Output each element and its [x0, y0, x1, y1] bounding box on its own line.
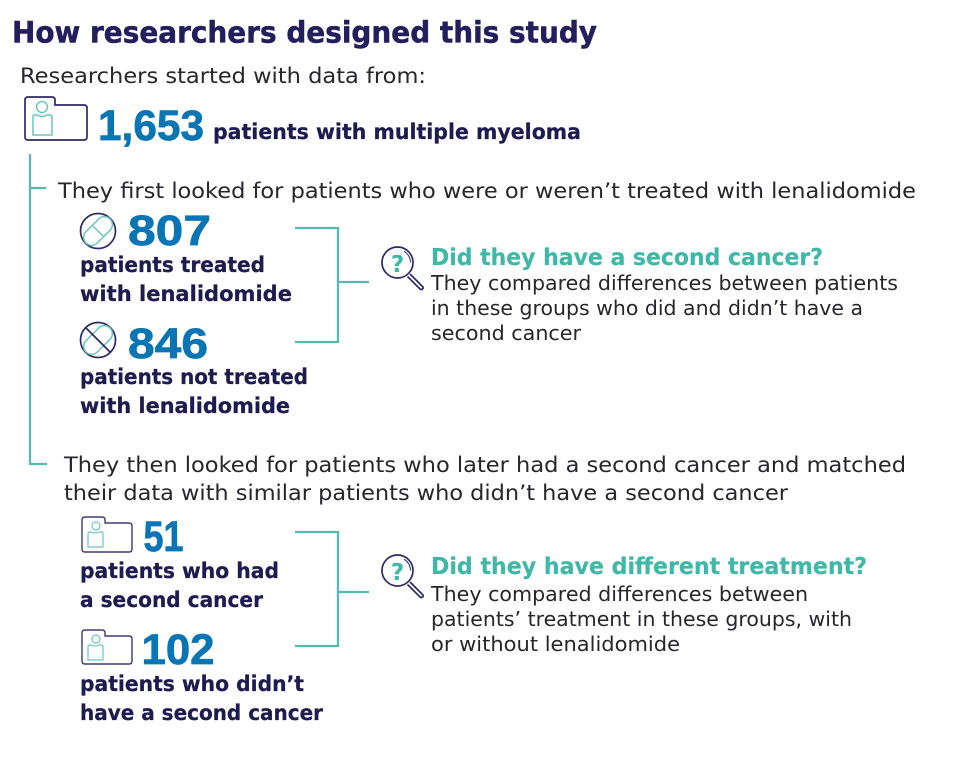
callout: second cancer question: They compared differences between patients — [430, 271, 898, 295]
no second cancer label: patients who didn’t — [80, 672, 304, 696]
callout: treatment question: Did they have different treatment? — [431, 554, 867, 580]
icon: patient folder, second cancer — [82, 517, 132, 552]
step 2 description: They then looked for patients who later had a second cancer and matched — [63, 453, 906, 477]
flow connector: main branch — [30, 154, 47, 464]
total patients statistic — [98, 102, 581, 150]
second cancer label: a second cancer — [80, 588, 264, 612]
total patients statistic: 1,653 — [98, 102, 204, 150]
treated group label: with lenalidomide — [80, 282, 292, 306]
icon: patient folder, no second cancer — [82, 630, 132, 664]
callout: treatment question: patients’ treatment in these groups, with — [431, 607, 852, 631]
second cancer label — [80, 559, 279, 612]
no second cancer label: have a second cancer — [80, 701, 324, 725]
callout: second cancer question: in these groups who did and didn’t have a — [431, 296, 863, 320]
total patients statistic: patients with multiple myeloma — [213, 120, 581, 144]
no second cancer label — [80, 672, 324, 725]
icon: crossed-out pill — [80, 322, 116, 358]
second cancer statistic: 51 — [144, 513, 184, 561]
icon: magnifying glass with question mark, second: ? — [391, 560, 404, 586]
icon: magnifying glass with question mark, second — [382, 555, 423, 598]
untreated group label — [80, 365, 308, 418]
untreated group label: patients not treated — [80, 365, 308, 389]
treated group label: patients treated — [80, 253, 265, 277]
icon: magnifying glass with question mark: ? — [391, 252, 404, 278]
callout: treatment question — [430, 554, 867, 656]
bracket connector: second cancer groups — [295, 532, 369, 646]
no second cancer statistic: 102 — [142, 626, 214, 674]
callout: second cancer question — [430, 245, 898, 345]
untreated group label: with lenalidomide — [80, 394, 290, 418]
step 2 description: their data with similar patients who didn’t have a second cancer — [64, 481, 788, 505]
untreated group statistic: 846 — [128, 320, 208, 368]
intro text: Researchers started with data from: — [20, 64, 426, 88]
treated group label — [80, 253, 292, 306]
callout: second cancer question: second cancer — [431, 321, 582, 345]
icon: magnifying glass with question mark — [382, 247, 423, 290]
icon: patient folder — [25, 97, 87, 140]
callout: second cancer question: Did they have a second cancer? — [431, 245, 823, 271]
step 2 description — [63, 453, 906, 505]
title: How researchers designed this study — [12, 16, 597, 50]
second cancer label: patients who had — [80, 559, 279, 583]
step 1 description: They first looked for patients who were or weren’t treated with lenalidomide — [57, 179, 916, 203]
callout: treatment question: They compared differences between — [430, 582, 808, 606]
treated group statistic: 807 — [128, 207, 211, 255]
icon: pill — [80, 213, 116, 249]
bracket connector: lenalidomide groups — [295, 228, 369, 342]
callout: treatment question: or without lenalidomide — [431, 632, 680, 656]
